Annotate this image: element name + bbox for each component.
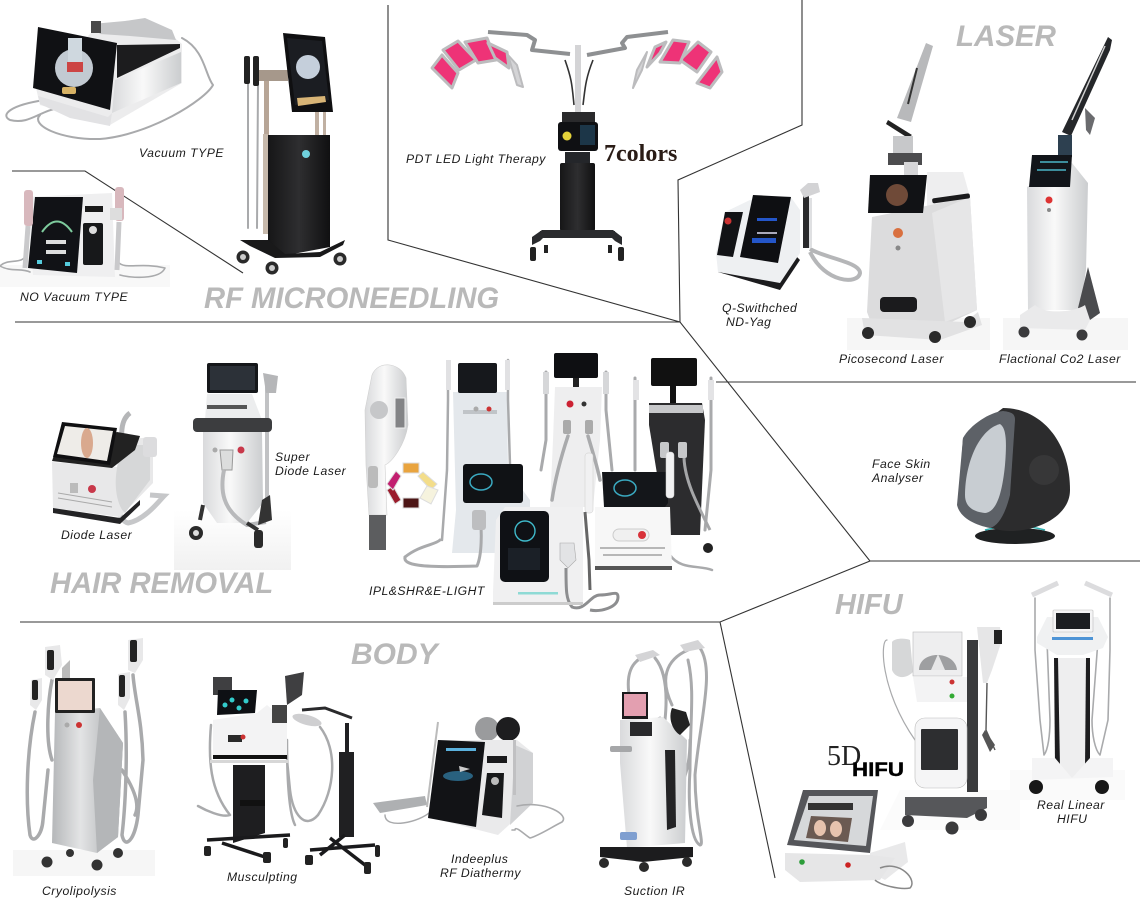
label: super diode laser (275, 450, 347, 478)
label: Q-switched ND-Yag (722, 301, 798, 329)
IPL filter wheel (387, 463, 438, 508)
label: IPL SHR E-light: IPL&SHR&E-LIGHT (369, 584, 486, 598)
device: cryolipolysis (13, 638, 155, 876)
label: 5D HIFU (827, 741, 904, 781)
label: cryolipolysis: Cryolipolysis (42, 884, 117, 898)
device: portable HIFU (785, 790, 912, 888)
label: picosecond laser: Picosecond Laser (839, 352, 944, 366)
device: musculpting (198, 672, 380, 874)
label: diode laser: Diode Laser (61, 528, 133, 542)
device group: IPL SHR E-light (365, 353, 714, 610)
label: face skin analyser (871, 457, 931, 485)
label: Indeeplus RF diathermy: Indeeplus (451, 852, 508, 866)
label: real linear HIFU (1037, 798, 1105, 826)
label: Q-switched ND-Yag: Q-Swithched (722, 301, 798, 315)
device: real linear HIFU (1010, 583, 1125, 800)
label: 5D HIFU: 5D (827, 741, 861, 772)
label: face skin analyser: Face Skin (872, 457, 931, 471)
device: super diode laser (174, 363, 291, 570)
back machine right dark (633, 358, 714, 570)
device: vacuum type tower (236, 33, 346, 274)
heading: RF microneedling: RF MICRONEEDLING (204, 283, 499, 315)
label: 5D HIFU: HIFU (852, 760, 904, 781)
label: vacuum type: Vacuum TYPE (139, 146, 224, 160)
device: no vacuum type (0, 187, 170, 287)
device: picosecond laser (847, 43, 990, 350)
heading: hair removal: HAIR REMOVAL (50, 568, 273, 600)
heading: laser: LASER (956, 20, 1057, 53)
label: Q-switched ND-Yag: ND-Yag (726, 315, 771, 329)
device: fractional CO2 laser (1003, 37, 1128, 350)
device: Q-switched ND-Yag (716, 183, 860, 290)
device: diode laser (52, 413, 164, 524)
label: 7colors: 7colors (604, 141, 677, 167)
label: no vacuum type: NO Vacuum TYPE (20, 290, 129, 304)
device: Indeeplus RF diathermy (373, 717, 564, 838)
heading: body: BODY (351, 638, 441, 671)
label: real linear HIFU: HIFU (1057, 812, 1087, 826)
back machine center (541, 353, 612, 507)
back machine left (405, 360, 530, 567)
label: super diode laser: Super (275, 450, 310, 464)
IPL handpiece (365, 365, 408, 550)
label: PDT LED light therapy: PDT LED Light Therapy (406, 152, 546, 166)
label: face skin analyser: Analyser (871, 471, 924, 485)
label: real linear HIFU: Real Linear (1037, 798, 1105, 812)
heading: HIFU: HIFU (835, 589, 904, 621)
label: super diode laser: Diode Laser (275, 464, 347, 478)
device: suction IR (599, 640, 706, 872)
label: fractional CO2 laser: Flactional Co2 Laser (999, 352, 1121, 366)
label: Indeeplus RF diathermy (440, 852, 521, 880)
device: face skin analyser (957, 408, 1070, 544)
front machine (493, 507, 618, 610)
device: PDT LED light therapy (432, 32, 722, 261)
device: 5D HIFU tower (880, 627, 1020, 834)
label: suction IR: Suction IR (624, 884, 685, 898)
small machine right (585, 452, 674, 590)
device: vacuum type desktop RF microneedling (6, 18, 213, 139)
label: Indeeplus RF diathermy: RF Diathermy (440, 866, 521, 880)
label: musculpting: Musculpting (227, 870, 298, 884)
